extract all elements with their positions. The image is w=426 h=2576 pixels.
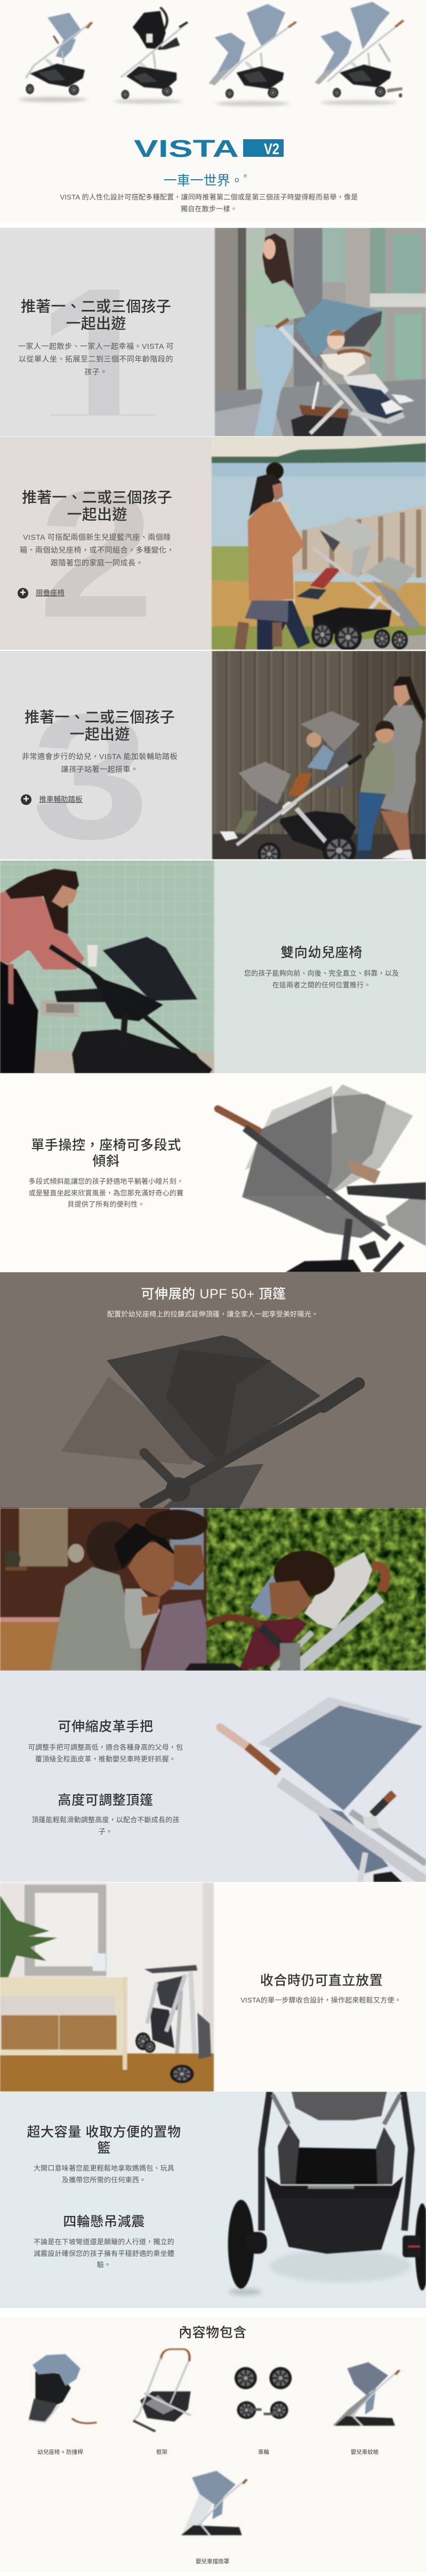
heading: 傾斜 [92,1154,120,1169]
text [31,1816,180,1836]
photo: mother and kids with stroller by wooden wall [211,651,426,859]
double stroller with kids [220,711,361,866]
item: wheels [235,2367,292,2419]
heading: 一起出遊 [67,506,127,523]
folded stroller [135,1965,211,2083]
text [244,969,399,989]
text [20,533,174,567]
link: 推車輔助踏板 [39,795,82,803]
heading: 收合時仍可直立放置 [260,1973,383,1988]
heading: 四輪懸吊減震 [63,2214,145,2229]
text: 配置於幼兒座椅上的拉鍊式延伸頂篷，讓全家人一起享受美好陽光。 [107,1310,318,1318]
intro text: 獨自在散步一樣。 [181,205,237,213]
text: 驗。 [97,2261,111,2269]
couple [234,462,310,650]
heading: 一起出遊 [66,315,126,332]
big number 2: 2 [38,453,154,650]
heading: 籃 [97,2141,111,2156]
photo: mother with black stroller at tiled wall [0,860,214,1073]
icon: plus [21,794,31,805]
photo: couple with double stroller by the water [211,442,426,650]
text: 您的孩子能夠向前、向後、完全直立、斜靠，以及 [244,969,399,977]
label: 嬰兒車蚊帳 [351,2449,379,2455]
text: 箱、兩個幼兒座椅，或不同組合，多種變化， [20,546,174,554]
heading: 推著一、二或三個孩子 [25,709,175,725]
text [18,342,174,376]
photo: stroller front with large basket [227,2092,426,2297]
mother [372,676,426,859]
panel: one child [0,228,426,436]
text: 在這兩者之間的任何位置推行。 [272,981,371,989]
heading [22,489,172,523]
text [34,2164,174,2184]
panel: one-hand recline [0,1073,426,1272]
heading: 超大容量 收取方便的置物 [27,2125,181,2140]
black stroller [50,937,211,1073]
panel: telescoping handle and adjustable canopy [0,1671,426,1882]
text: 一家人一起散步、一家人一起幸福。VISTA 可 [18,342,174,350]
label: 幼兒座椅 + 防撞桿 [37,2449,83,2455]
label: 框架 [156,2449,167,2455]
heading [25,709,175,743]
text: 或是豎直坐起來欣賞風景，為您那充滿好奇心的寶 [29,1189,183,1197]
panel: three children [0,651,426,859]
heading: 高度可調整頂篷 [58,1793,154,1808]
link: 摺疊座椅 [36,589,65,597]
text: 不論是在下坡彎道還是顛簸的人行道，獨立的 [34,2238,174,2246]
label: 嬰兒車擋雨罩 [196,2558,229,2565]
text: 讓孩子站著一起搭車。 [61,765,139,773]
intro text [60,193,358,213]
logo: VISTA V2: V2 [264,141,279,158]
stroller: two seats [208,4,296,106]
label: 車輪 [258,2449,269,2455]
text [22,752,178,773]
icon: plus: + [20,587,26,599]
panel: UPF 50+ canopy [0,1272,426,1508]
heading: 推著一、二或三個孩子 [21,298,171,315]
heading: 可伸展的 UPF 50+ 頂篷 [141,1287,286,1302]
stroller: single seat [19,13,92,102]
panel: storage basket and suspension [0,2092,426,2308]
text [34,2238,174,2269]
panel: two children [0,437,426,650]
icon: plus [18,588,28,599]
text: 跟隨著您的家庭一同成長。 [51,559,143,567]
icon: plus: + [23,793,29,805]
slogan: 一車一世界。® [164,173,247,188]
text: 貝提供了所有的便利性。 [67,1200,145,1208]
heading: 可伸縮皮革手把 [58,1719,154,1734]
daughter [124,1510,208,1671]
image: four stroller configurations [19,1,405,108]
woman [0,869,84,1073]
woman [246,234,306,436]
item: rain cover [181,2471,247,2535]
toddler in stroller [185,1551,385,1671]
text: VISTA的單一步驟收合設計，操作起來輕鬆又方便。 [240,1996,401,2004]
heading: 單手操控，座椅可多段式 [31,1138,181,1153]
text: 頂篷能輕鬆滑動調整高度，以配合不斷成長的孩 [31,1816,180,1824]
logo: VISTA V2 [134,136,284,161]
text: 大開口意味著您能更輕鬆地拿取媽媽包、玩具 [34,2164,174,2172]
text: 非常適會步行的幼兒，VISTA 能加裝輔助踏板 [22,752,178,761]
item: mosquito net [333,2362,399,2426]
text: 可調整手把可調整高低，適合各種身高的父母，包 [28,1743,183,1751]
item: toddler seat and bumper bar [29,2354,97,2423]
heading: 雙向幼兒座椅 [280,945,363,960]
heading [31,1138,181,1169]
text: 孩子。 [84,368,108,376]
photo: mother, daughter and toddler in stroller [0,1508,426,1671]
mother [50,1521,179,1671]
photo: folded stroller beside console table [0,1883,215,2092]
intro text: VISTA 的人性化設計可搭配多種配置，讓同時推著第二個或是第三個孩子時變得輕而易舉，像是 [60,193,358,201]
boy [357,721,395,859]
stroller [276,299,414,436]
stroller: two seats with riding board [315,2,404,105]
panel: what's included [0,2317,426,2571]
text [28,1743,183,1763]
text: 減震設計確保您的孩子擁有平穩舒適的乘坐體 [34,2250,174,2258]
panel: reversible toddler seat [0,860,426,1073]
heading: 推著一、二或三個孩子 [22,489,172,506]
panel: stands when folded [0,1883,426,2092]
heading: 內容物包含 [179,2325,247,2340]
item: frame [133,2349,191,2431]
photo: black stroller canopy extended [61,1335,365,1508]
text: VISTA 可搭配兩個新生兒提籃汽座、兩個睡 [23,533,171,541]
panel: hero [0,0,426,223]
image: included items [28,2347,401,2536]
heading [21,298,171,332]
text: 多段式傾斜能讓您的孩子舒適地平躺著小睡片刻， [29,1177,183,1185]
photo: mother pushing stroller by building [214,228,426,436]
photo: stroller seat reclining with ghost positions [213,1084,426,1272]
text [29,1177,183,1208]
stroller: infant car seat [114,7,188,103]
heading [27,2125,181,2156]
text: 以從單人坐、拓展至二到三個不同年齡階段的 [19,355,173,363]
double stroller [296,516,421,651]
photo: canopy and handle adjustment [215,1697,426,1882]
text: 子。 [99,1828,112,1836]
heading: 一起出遊 [70,726,130,743]
text: 覆頂級全粒面皮革，推動嬰兒車時更好抓握。 [35,1755,176,1763]
text: 及攜帶您所需的任何東西。 [62,2176,146,2184]
